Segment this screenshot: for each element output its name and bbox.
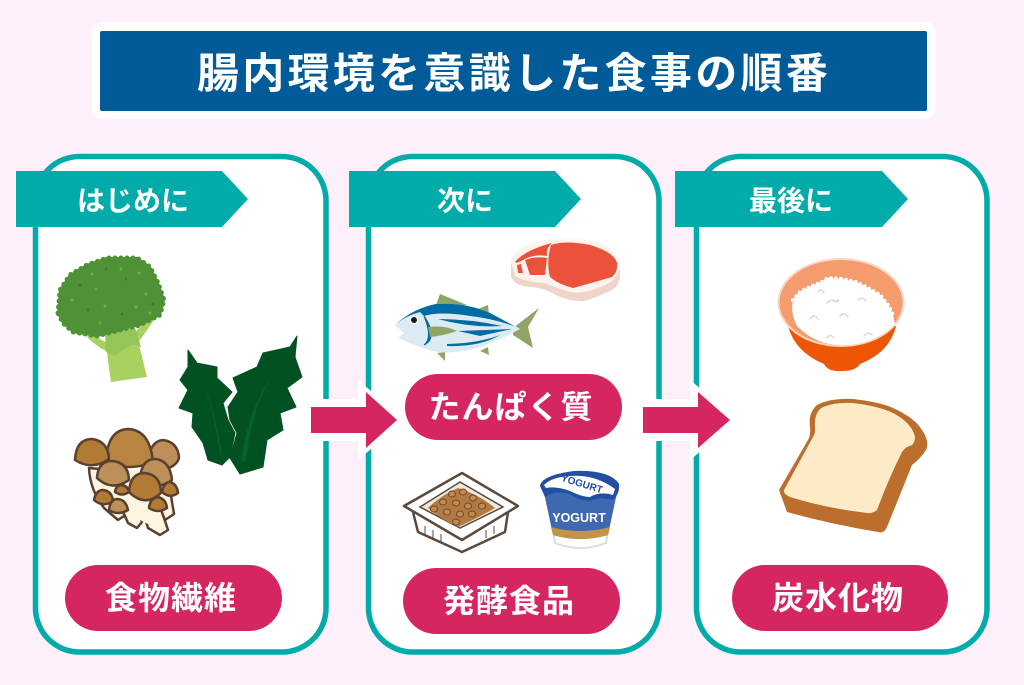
label: fermented foods: 発酵食品 xyxy=(443,583,575,619)
label: dietary fiber: 食物繊維 xyxy=(105,580,237,616)
icon: shimeji mushrooms xyxy=(75,429,179,535)
step ribbon: last: 最後に xyxy=(749,186,833,216)
arrow: next to last xyxy=(635,380,738,460)
panel: next, protein and fermented foods xyxy=(349,156,659,652)
icon: yogurt: YOGURT xyxy=(552,511,606,525)
title: 腸内環境を意識した食事の順番 xyxy=(197,50,831,97)
label: protein: たんぱく質 xyxy=(428,389,594,425)
arrow: first to next xyxy=(303,380,405,460)
label: fermented foods xyxy=(403,568,620,634)
label: carbohydrates: 炭水化物 xyxy=(772,580,904,616)
step ribbon: next xyxy=(349,171,581,227)
icon: natto xyxy=(404,473,518,552)
step ribbon: next: 次に xyxy=(437,186,493,216)
icon: yogurt: YOGURT xyxy=(560,473,604,496)
step ribbon: first xyxy=(16,171,248,227)
step ribbon: last xyxy=(675,171,908,227)
step ribbon: first: はじめに xyxy=(77,186,189,216)
label: carbohydrates xyxy=(732,565,948,631)
panel: first, dietary fiber xyxy=(16,156,326,652)
icon: seaweed xyxy=(179,336,302,474)
icon: bread xyxy=(779,399,927,532)
icon: meat xyxy=(511,239,620,301)
label: dietary fiber xyxy=(65,565,282,631)
label: protein xyxy=(405,374,622,440)
panel: last, carbohydrates xyxy=(675,156,987,652)
icon: rice bowl xyxy=(778,259,904,371)
icon: yogurt xyxy=(540,471,619,548)
title xyxy=(92,22,935,119)
icon: broccoli xyxy=(58,258,164,382)
icon: fish xyxy=(395,294,539,361)
